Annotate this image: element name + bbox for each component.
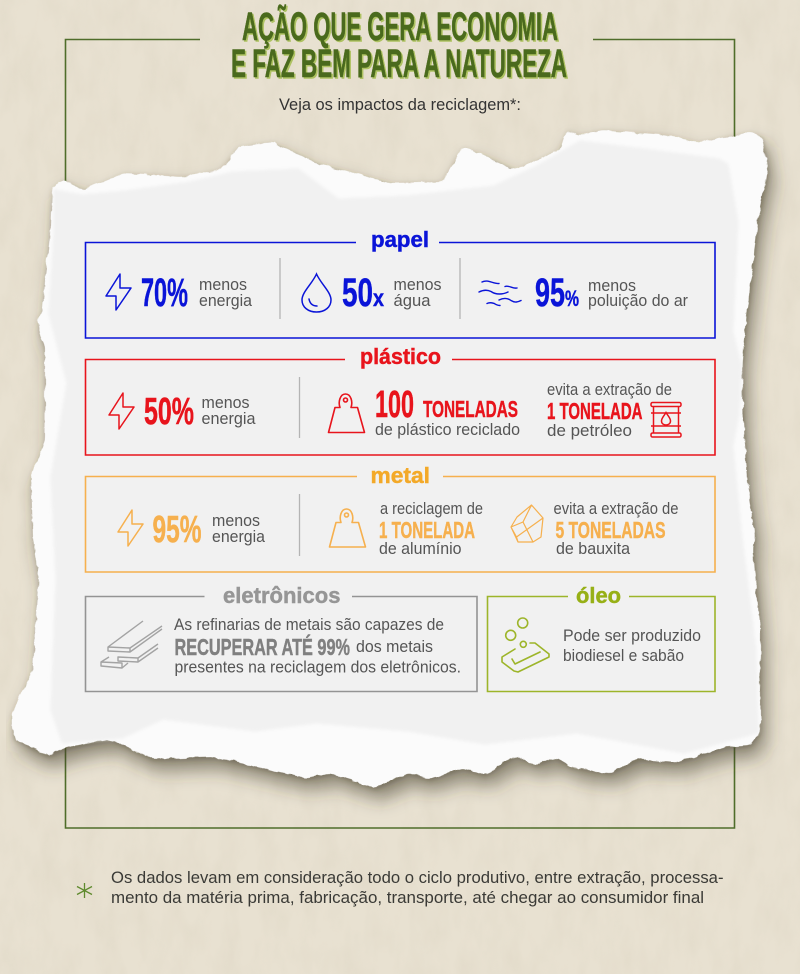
green frame	[66, 40, 734, 828]
stat: evita a extração de 1 tonelada de petróleo: evita a extração de	[547, 380, 672, 399]
stat: 95% menos poluição do ar: 95	[535, 271, 565, 315]
text: refinarias: RECUPERAR ATÉ 99%	[174, 633, 350, 660]
panel: plástico	[86, 344, 715, 455]
text: biodiesel e sabão: Pode ser produzido	[563, 626, 701, 645]
heading: óleo: óleo	[576, 583, 621, 608]
panel: óleo	[488, 583, 715, 692]
stat: 100 toneladas de plástico reciclado: de plástico reciclado	[375, 420, 520, 439]
panel: eletrônicos	[86, 583, 477, 692]
heading: eletrônicos: eletrônicos	[223, 583, 340, 608]
stat: 95% menos poluição do ar: %	[565, 286, 579, 311]
stat: 50x menos água: água	[394, 291, 431, 310]
stat: evita a extração de 5 toneladas de bauxita: evita a extração de	[554, 499, 678, 518]
stat: 95% menos energia	[152, 509, 266, 551]
divider	[280, 258, 460, 319]
footnote: mento da matéria prima, fabricação, transporte, até chegar ao consumidor final	[111, 888, 704, 907]
footnote: Os dados levam em consideração todo o ciclo produtivo, entre extração, processa-	[111, 868, 724, 887]
icon: weight	[328, 394, 364, 432]
stat: 70% menos energia: energia	[199, 291, 253, 310]
heading: papel: papel	[371, 227, 429, 252]
stat: 50x menos água: x	[373, 285, 384, 311]
stat: 95% menos energia: energia	[212, 527, 266, 546]
icon: lightning bolt	[118, 510, 143, 546]
stat: a reciclagem de 1 tonelada de alumínio: a reciclagem de	[380, 499, 483, 518]
stat: 50x menos água: menos	[394, 275, 442, 294]
divider	[298, 494, 300, 556]
stat: evita a extração de 1 tonelada de petróleo: de petróleo	[547, 421, 632, 440]
text: biodiesel e sabão: biodiesel e sabão	[563, 646, 684, 665]
text: refinarias	[174, 615, 461, 676]
text: refinarias: presentes na reciclagem dos eletrônicos.	[174, 658, 461, 676]
torn paper sheet	[12, 130, 774, 800]
stat: 50x menos água	[342, 271, 442, 315]
text: refinarias: As refinarias de metais são capazes de	[174, 615, 444, 634]
title: AÇÃO QUE GERA ECONOMIA	[242, 3, 558, 49]
stat: 95% menos poluição do ar	[535, 271, 688, 315]
stat: evita a extração de 5 toneladas de bauxita	[554, 499, 678, 558]
icon: oil barrel	[651, 402, 681, 437]
stat: 50x menos água: 50	[342, 271, 373, 315]
stat: 95% menos energia: menos	[212, 511, 260, 530]
stat: 50% menos energia: 50%	[144, 391, 194, 433]
icon: weight	[330, 509, 366, 547]
panel: metal	[86, 463, 715, 572]
subtitle: Veja os impactos da reciclagem*:	[279, 95, 521, 114]
stat: 50% menos energia: menos	[202, 393, 250, 412]
divider	[298, 377, 300, 438]
icon: lightning bolt	[109, 393, 134, 429]
text: refinarias: dos metais	[356, 637, 433, 656]
stat: a reciclagem de 1 tonelada de alumínio: de alumínio	[379, 539, 462, 558]
stat: a reciclagem de 1 tonelada de alumínio	[379, 499, 483, 558]
stat: 100 toneladas de plástico reciclado: 100	[375, 384, 414, 426]
title	[231, 3, 568, 88]
icon: lightning bolt	[106, 274, 131, 310]
stat: 70% menos energia: menos	[199, 275, 247, 294]
stat: a reciclagem de 1 tonelada de alumínio: 1 TONELADA	[379, 517, 475, 543]
icon: wind waves	[479, 281, 521, 306]
stat: 100 toneladas de plástico reciclado: TONELADAS	[423, 396, 518, 422]
stat: 95% menos energia: 95%	[152, 509, 202, 551]
stat: 50% menos energia: energia	[202, 409, 256, 428]
panel: papel	[86, 227, 715, 338]
heading: metal: metal	[370, 463, 430, 488]
icon: soap and bubbles	[502, 618, 549, 672]
stat: evita a extração de 1 tonelada de petróleo	[547, 380, 672, 440]
stat: evita a extração de 1 tonelada de petróleo: 1 TONELADA	[547, 398, 642, 424]
title: AÇÃO QUE GERA ECONOMIA	[244, 4, 560, 50]
stat: 50% menos energia	[144, 391, 256, 433]
stat: 70% menos energia: 70%	[141, 271, 188, 315]
icon: bauxite rock	[511, 505, 543, 542]
heading: plástico: plástico	[360, 344, 441, 369]
stat: evita a extração de 5 toneladas de bauxita: 5 TONELADAS	[556, 517, 666, 543]
icon: water drop	[302, 274, 331, 312]
text: biodiesel e sabão	[563, 626, 701, 665]
icon: metal bars	[101, 621, 162, 668]
stat: 100 toneladas de plástico reciclado	[375, 384, 520, 439]
icon: asterisk	[77, 883, 92, 898]
stat: evita a extração de 5 toneladas de bauxita: de bauxita	[556, 539, 631, 558]
stat: 95% menos poluição do ar: menos	[588, 276, 636, 295]
stat: 95% menos poluição do ar: poluição do ar	[588, 291, 688, 310]
footnote	[111, 868, 724, 907]
